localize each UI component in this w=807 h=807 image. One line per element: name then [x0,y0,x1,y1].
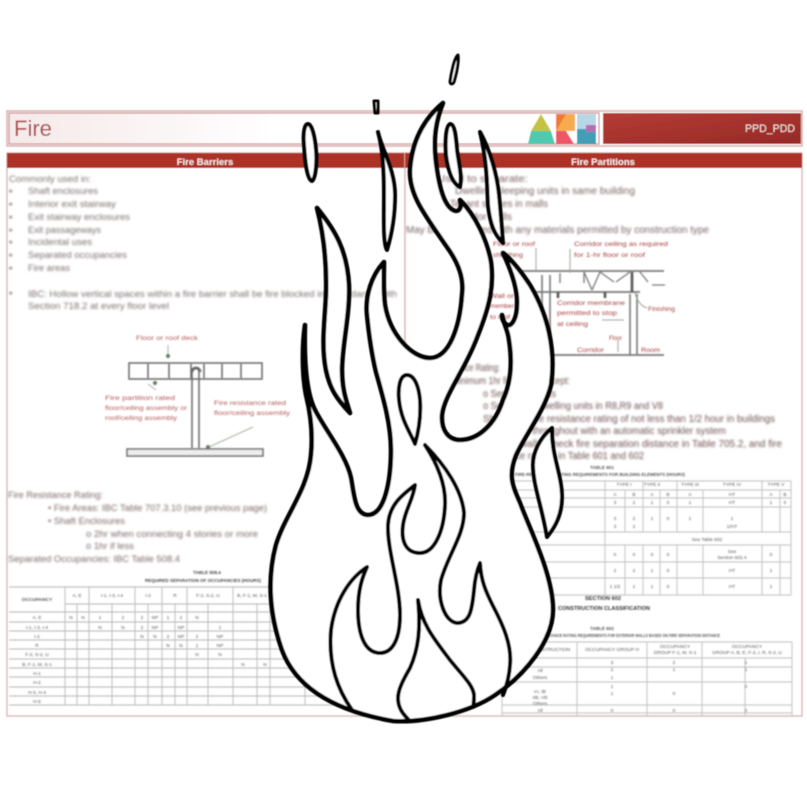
table: required separation of occupancies: N [166,643,170,649]
diagram: fire partition section: Floor [609,335,623,342]
table: construction requirements, table 601: 2 [633,524,636,530]
text: fire barriers uses: ▪ [9,263,12,274]
table: table 602: 1 [611,684,614,690]
text: fire resistance rating, partitions: sprinklered throughout with an automatic sprinkler system [483,426,726,437]
table: construction requirements, table 601: See [728,549,737,555]
table: construction requirements, table 601: 0 [667,516,670,522]
table: construction requirements, table 601: 1 [651,516,654,522]
table: construction requirements, table 601: A [650,492,654,498]
table: table 602: 1 [745,660,748,666]
table: table 602: TYPE OF CONSTRUCTION [510,647,571,653]
diagram: fire partition section: Corridor ceiling as required [574,241,668,248]
table: construction requirements, table 601: 0 [667,584,670,590]
table: construction requirements, table 601: FIRE-RESISTANCE RATING REQUIREMENTS FOR BUILDING ELEMENTS (HOURS) [515,472,685,477]
page sheet [7,111,802,716]
panel: fire partitions [405,153,802,716]
table: required separation of occupancies: 1 [167,615,170,621]
text: fire partitions uses: Tenant spaces in malls [450,199,548,210]
table: table 602: 0 [745,708,748,714]
table: construction requirements, table 601: 1 [689,500,692,506]
table: required separation of occupancies: I-1, I-3, I-4 [26,625,48,631]
text: fire resistance rating, partitions: o Separating dwelling units in R8,R9 and V8 [483,401,663,412]
table: construction requirements, table 601: TABLE 601 [590,465,614,470]
table: required separation of occupancies: 2 [141,615,144,621]
spark: right sliver [480,132,503,243]
text: fire resistance rating, barriers: o 1hr if less [86,541,134,552]
table: table 602: 2 [611,667,614,673]
text: fire resistance rating, partitions: Shall have fire resistance rating of not less than 1/2 hour in buildings [483,414,775,425]
text: section 602 heading [558,596,650,612]
text: fire barriers uses: Section 718.2 at every floor level [28,301,169,312]
table: required separation of occupancies: F-2, S-2, U [25,652,49,658]
text: fire barriers uses: IBC: Hollow vertical spaces within a fire barrier shall be fire blocked in accordance with [28,289,397,300]
table: construction requirements, table 601: A [769,492,773,498]
table: construction requirements, table 601: See Table 602 [692,537,723,543]
diagram: fire partition section: at ceiling [557,321,588,328]
table: table 602: OCCUPANCY GROUP H [585,647,639,653]
title bar [7,111,802,146]
table: construction requirements, table 601 [510,465,791,595]
table: required separation of occupancies: NP [178,634,184,640]
table: required separation of occupancies: A, E [72,593,82,599]
table: construction requirements, table 601: 1 [651,568,654,574]
table: required separation of occupancies: R [173,593,177,599]
table: table 602: FIRE-RESISTANCE RATING REQUIREMENTS FOR EXTERIOR WALLS BASED ON FIRE SEPARATION DISTANCE [530,633,720,638]
table: construction requirements, table 601: 1 1/2 [610,584,621,590]
diagram: fire partition section: Corridor membrane [557,300,625,307]
table: required separation of occupancies: H-2 [33,680,41,686]
text: fire resistance rating, barriers: o 2hr when connecting 4 stories or more [86,529,258,540]
table: table 602: IA, IB [534,689,546,695]
text: fire barriers uses: Commonly used in: [9,174,91,185]
table: required separation of occupancies: N [153,634,157,640]
table: construction requirements, table 601: 1 [651,500,654,506]
table: required separation of occupancies: N [263,662,267,668]
table: construction requirements, table 601: HT [729,492,735,498]
table: required separation of occupancies: H-1 [33,671,41,677]
text: fire barriers uses: Exit passageways [28,225,101,236]
diagram: fire barrier section: floor/ceiling assembly or [105,405,188,412]
table: construction requirements, table 601: 2 [633,516,636,522]
table: construction requirements, table 601: Section 602.4 [717,555,747,561]
table: construction requirements, table 601: A [613,492,617,498]
flame right leaf [533,428,562,537]
table: table 602: 3 [611,660,614,666]
table: construction requirements, table 601: 0 [651,552,654,558]
table: construction requirements, table 601: 1 [689,516,692,522]
table: construction requirements, table 601: 1 [770,568,773,574]
table: required separation of occupancies: N [121,625,125,631]
table: required separation of occupancies: N [241,662,245,668]
table: construction requirements, table 601: A [688,492,692,498]
diagram: fire partition section: Floor or roof [493,241,535,248]
table: required separation of occupancies: NP [152,615,158,621]
text: fire partitions uses: May be constructed with any materials permitted by construction type [406,225,709,236]
table: required separation of occupancies: 2 [180,615,183,621]
table: construction requirements, table 601: 1 [731,516,734,522]
table: construction requirements, table 601: TYPE IV [723,482,742,488]
diagram: fire barrier section: Fire resistance rated [214,400,286,407]
flame centre teardrop [399,375,420,444]
table: required separation of occupancies: I-1, I-3, I-4 [101,593,123,599]
panel: fire barriers [7,153,405,716]
table: table 602: GROUP F-1, M, S-1 [654,650,697,656]
table: construction requirements, table 601: 0 [614,552,617,558]
table: required separation of occupancies: NP [178,625,184,631]
table: required separation of occupancies: F-2, S-2, U [196,593,220,599]
table: table 602: All [537,708,543,714]
heading: fire partitions [405,153,802,168]
text: fire barriers uses: ▪ [9,186,12,197]
flame inner tongues [330,445,510,710]
table: table 602 [502,626,792,716]
text: fire barriers uses: ▪ [9,199,12,210]
table: required separation of occupancies: NP [217,634,223,640]
table: required separation of occupancies: N [140,634,144,640]
table: required separation of occupancies: 2 [167,634,170,640]
table: required separation of occupancies: N [69,615,73,621]
table: required separation of occupancies: NP [217,643,223,649]
table: construction requirements, table 601: 0 [667,568,670,574]
table: construction requirements, table 601: 0 [770,552,773,558]
text: fire partitions uses: Dwelling/sleeping units in same building [455,186,635,197]
table: table 602: GROUP A, B, E, F-2, I, R, S-2, U [712,650,782,656]
diagram: fire partition section: Wall or [490,293,515,300]
text: fire barriers uses [9,174,397,312]
text: fire barriers uses: ▪ [9,237,12,248]
diagram: fire partition section: permitted to stop [557,310,617,317]
table: table 602: 1 [745,667,748,673]
table: construction requirements, table 601: 1 [651,584,654,590]
diagram: fire barrier section: roof/ceiling assembly [105,415,178,422]
text: fire barriers uses: Exit stairway enclosures [28,212,130,223]
table: construction requirements, table 601: 2 [633,568,636,574]
diagram: fire barrier section: floor/ceiling assembly [214,410,291,417]
table: required separation of occupancies: B, F-1, M, S-1 [237,593,267,599]
text: fire resistance rating, barriers: Separated Occupancies: IBC Table 508.4 [8,554,181,565]
diagram: fire partition section: Room [641,347,661,354]
table: construction requirements, table 601: 1/HT [727,524,737,530]
diagram: fire partition section: member [490,303,515,310]
diagram: fire partition section: Corridor [577,347,605,354]
table: required separation of occupancies: N [98,625,102,631]
diagram: fire partition section: to roof [490,314,510,321]
table: construction requirements, table 601: TYPE V [767,482,785,488]
text: fire resistance rating, partitions: Minimum 1hr fire rating, except: [452,376,570,387]
table: required separation of occupancies: 2 [122,615,125,621]
table: construction requirements, table 601: HT [729,584,735,590]
diagram: fire partition section: for 1-hr floor or roof [574,252,645,259]
table: table 602: 0 [673,691,676,697]
spark: tiny [374,101,378,113]
table: required separation of occupancies: OCCUPANCY [22,597,53,603]
table: required separation of occupancies: 2 [196,634,199,640]
table: construction requirements, table 601: 0 [633,552,636,558]
table: table 602: 0 [673,708,676,714]
diagram: fire partition section: sheathing [493,252,523,259]
text: fire resistance rating, barriers: • Fire Areas: IBC Table 707.3.10 (see previous page) [48,503,267,514]
diagram: fire barrier section: Fire partition rated [105,395,175,402]
text: fire barriers uses: Incidental uses [28,237,92,248]
table: required separation of occupancies: TABLE 508.4 [193,570,221,575]
table: required separation of occupancies: N [195,615,199,621]
table: construction requirements, table 601: HT [729,568,735,574]
text: fire barriers uses: Separated occupancies [28,250,127,261]
flame bottom tongue [398,600,474,719]
text: fire resistance rating, partitions: o Separating units [483,389,556,400]
table: required separation of occupancies: H-5 [33,699,41,705]
diagram: fire partition section: Finishing [648,306,675,313]
text: section 602 heading: SECTION 602 [585,596,621,602]
spark: inner oval [446,124,461,187]
text: fire resistance rating, partitions [420,363,782,462]
table: construction requirements, table 601: 3 [614,516,617,522]
table: required separation of occupancies: A, E [32,615,42,621]
table: construction requirements, table 601: TYPE I [616,482,632,488]
table: construction requirements, table 601: 3 [614,524,617,530]
code tag box [603,113,801,144]
text: fire resistance rating, partitions: Exterior walls: check fire separation distance in Table 705.2, and fire [483,439,782,450]
table: required separation of occupancies: REQUIRED SEPARATION OF OCCUPANCIES (HOURS) [145,578,261,583]
table: construction requirements, table 601: HT [729,500,735,506]
table: table 602: IIB, VB [533,695,547,701]
table: required separation of occupancies: R [35,643,39,649]
flame left tongue [317,208,350,413]
text: fire barriers uses: ▪ [9,250,12,261]
table: table 602: 2 [673,660,676,666]
text: fire resistance rating, barriers: Fire Resistance Rating: [8,490,103,501]
heading: fire barriers [7,153,405,168]
table: construction requirements, table 601: B [632,492,636,498]
table: construction requirements, table 601: 2 [614,568,617,574]
table: table 602: 1 [611,675,614,681]
table: required separation of occupancies: N [179,643,183,649]
icon: flame drawing [271,55,562,721]
table: required separation of occupancies: NP [152,625,158,631]
text: fire partitions uses: Used to separate: [437,174,528,185]
table: construction requirements, table 601: 1 [770,584,773,590]
table: table 602: Others [533,701,548,707]
table: required separation of occupancies: H-3, H-4 [28,690,46,696]
table: table 602: TABLE 602 [590,626,614,631]
text: fire partitions uses [406,174,709,236]
ARE logo [528,114,596,144]
table: construction requirements, table 601: 1 [770,500,773,506]
table: table 602: 0 [745,684,748,690]
table: table 602: 1 [673,667,676,673]
diagram: fire partition section [490,241,675,355]
table: required separation of occupancies [9,570,405,705]
text: fire resistance rating, barriers: • Shaft Enclosures [48,516,125,527]
table: table 602: Others [533,675,548,681]
table: table 602: All [537,668,543,674]
table: construction requirements, table 601: B [783,492,787,498]
table: required separation of occupancies: 1 [99,615,102,621]
title text: Fire [14,116,52,141]
table: construction requirements, table 601: TYPE III [681,482,699,488]
flame main outline [271,103,553,721]
code tag box: PPD_PDD [745,123,795,135]
text: fire barriers uses: Interior exit stairway [28,199,116,210]
spark: left oval [304,124,316,181]
table: construction requirements, table 601: 0 [667,552,670,558]
table: required separation of occupancies: 1 [196,643,199,649]
table: required separation of occupancies: I-2 [145,593,151,599]
table: table 602: 1 [611,691,614,697]
text: fire partitions uses: Corridor walls [450,212,512,223]
table: table 602: OCCUPANCY [732,644,763,650]
text: section 602 heading: CONSTRUCTION CLASSIFICATION [558,606,650,612]
table: construction requirements, table 601: TYPE II [644,482,660,488]
text: fire resistance rating, partitions: Fire Resistance Rating: [420,363,500,374]
table: required separation of occupancies: 1 [219,625,222,631]
table: construction requirements, table 601: 2 [633,500,636,506]
table: required separation of occupancies: 2 [141,625,144,631]
text: fire barriers uses: Shaft enclosures [28,186,98,197]
table: required separation of occupancies: N [81,615,85,621]
table: table 602: 0 [611,708,614,714]
table: construction requirements, table 601: 0 [784,500,787,506]
heading: fire barriers: Fire Barriers [177,157,233,168]
diagram: fire barrier section [105,335,291,456]
diagram: fire barrier section: Floor or roof deck [136,335,199,342]
table: table 602: OCCUPANCY [660,644,691,650]
table: required separation of occupancies: N [218,652,222,658]
table: construction requirements, table 601: B [666,492,670,498]
text: fire resistance rating, partitions: resistance ratings in Table 601 and 602 [483,451,644,462]
spark: long left sliver [378,132,395,250]
table: construction requirements, table 601: 1 [633,584,636,590]
table: required separation of occupancies: I-2 [34,634,40,640]
table: required separation of occupancies: N [195,652,199,658]
table: required separation of occupancies: B, F-1, M, S-1 [22,662,52,668]
heading: fire partitions: Fire Partitions [571,157,635,168]
table: construction requirements, table 601: 0 [667,500,670,506]
text: fire barriers uses: Fire areas [28,263,70,274]
text: fire resistance rating, barriers [8,490,267,565]
table: construction requirements, table 601: 3 [614,500,617,506]
text: fire barriers uses: ▪ [9,288,12,299]
text: fire barriers uses: ▪ [9,225,12,236]
text: fire barriers uses: ▪ [9,212,12,223]
spark: top [450,55,458,84]
